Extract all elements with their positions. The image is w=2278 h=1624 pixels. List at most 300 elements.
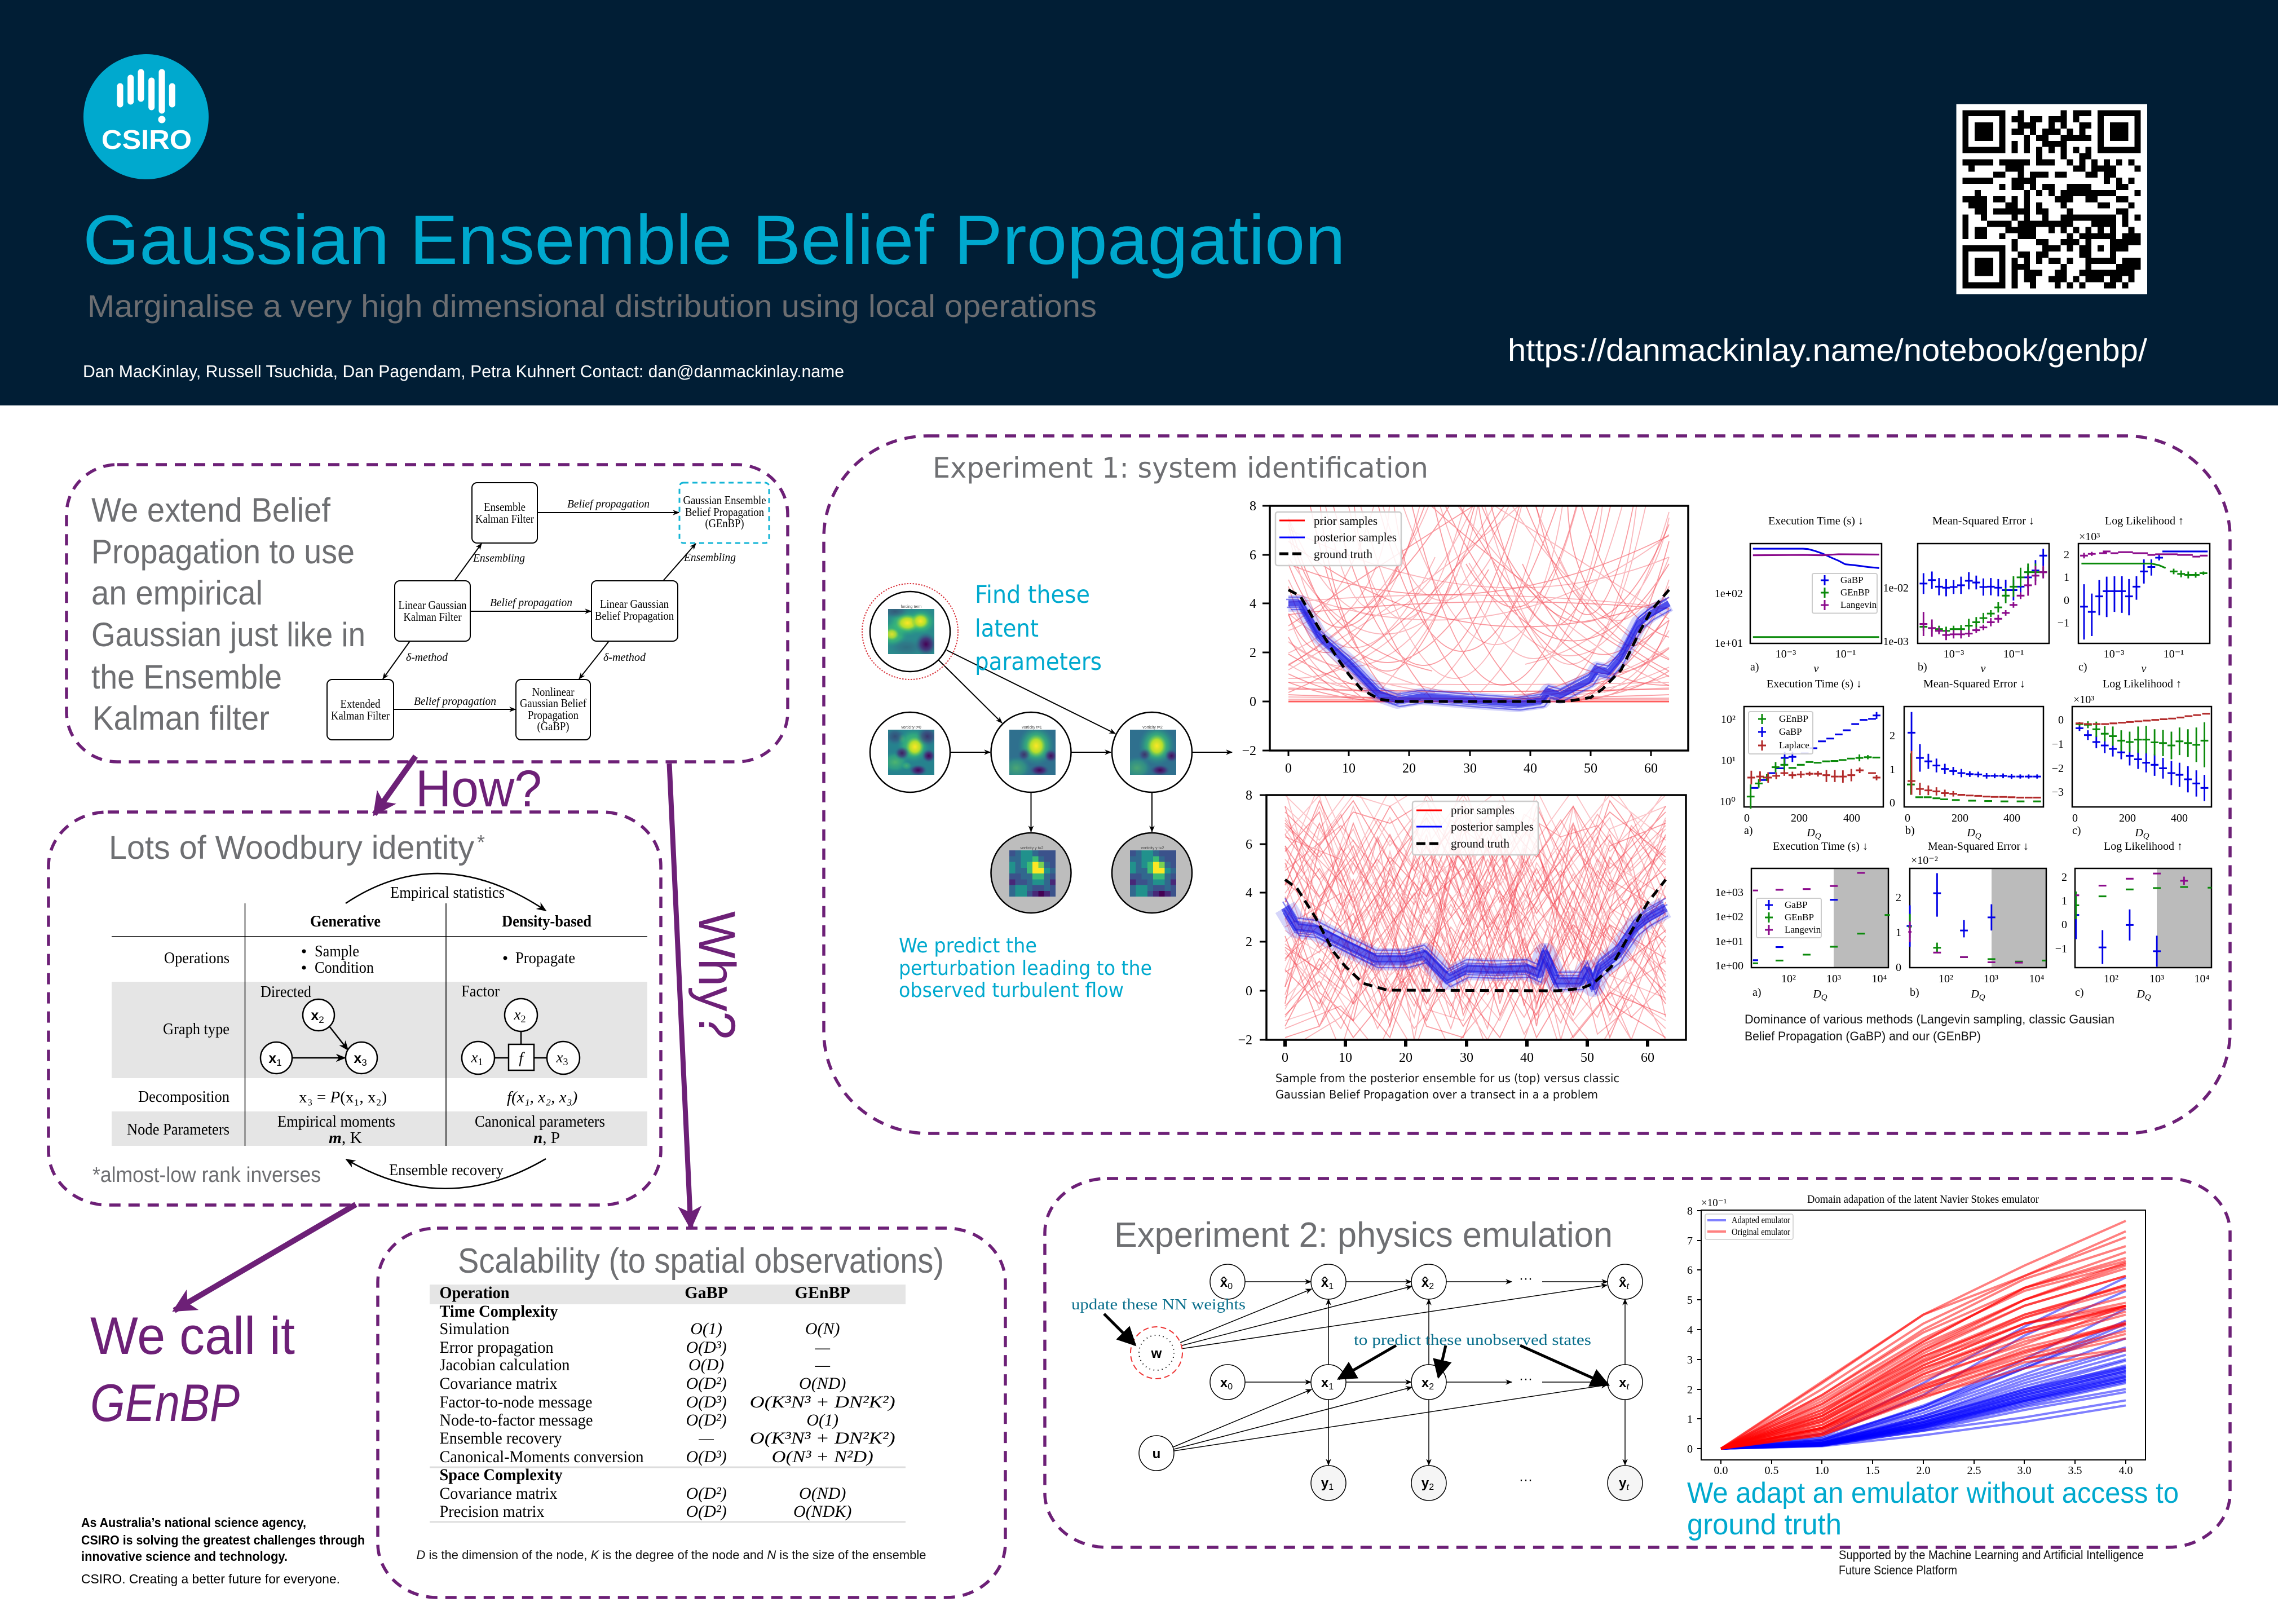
flow diagram: method relations: Nonlinear <box>532 685 574 699</box>
graph: directed model: x <box>311 1008 319 1023</box>
flow diagram: method relations: Ensembling <box>683 551 736 564</box>
flow diagram: method relations: Linear Gaussian <box>398 598 467 612</box>
comparison table: Directed <box>261 983 311 1001</box>
error-bar series <box>1747 549 2211 967</box>
complexity table: O(N) <box>805 1320 840 1338</box>
graphical model: emulator: y <box>1321 1476 1328 1491</box>
complexity table: Error propagation <box>440 1338 554 1357</box>
line chart: GaBP posterior: 8 <box>1246 788 1252 803</box>
line chart: GEnBP posterior: 8 <box>1250 499 1256 514</box>
axis labels: c) <box>2075 986 2084 999</box>
graph: factor model: 3 <box>563 1056 568 1067</box>
line chart: GaBP posterior: 4 <box>1246 886 1252 901</box>
complexity table: Simulation <box>440 1320 510 1338</box>
line chart: GaBP posterior: 20 <box>1399 1051 1412 1065</box>
axis labels: 200 <box>1791 812 1808 824</box>
comparison table: Ensemble recovery <box>389 1161 504 1179</box>
complexity table: Ensemble recovery <box>440 1429 562 1448</box>
axis labels: 400 <box>2003 812 2020 824</box>
axis labels: 1e+01 <box>1715 935 1743 948</box>
axis labels: 10² <box>1781 973 1796 985</box>
axis labels: −1 <box>2052 738 2064 751</box>
legend: row 2: Laplace <box>1779 740 1809 751</box>
complexity table: O(K³N³ + DN²K²) <box>750 1429 895 1448</box>
flow diagram: method relations: Propagation <box>528 708 579 722</box>
small heatmap titles: vorticity t=1 <box>1022 726 1042 730</box>
axis labels: 1e+02 <box>1715 588 1743 600</box>
text: we predict: perturbation leading to the <box>899 957 1152 980</box>
subtitle: Marginalise a very high dimensional distribution using local operations <box>87 288 1097 324</box>
complexity table <box>430 1283 906 1522</box>
axis labels: −1 <box>2058 617 2069 629</box>
graphical model: emulator: x̂ <box>1321 1275 1328 1290</box>
panel: experiment 2 <box>1045 1179 2230 1547</box>
line chart: GaBP posterior: 60 <box>1641 1051 1654 1065</box>
graphical model: emulator: x <box>1220 1375 1228 1391</box>
annotation: predict states: to predict these unobserved states <box>1354 1331 1591 1348</box>
axis labels: 2 <box>1896 892 1901 904</box>
axis labels: 10⁻³ <box>1944 648 1964 660</box>
legend: ground truth <box>1314 547 1372 561</box>
legend <box>1275 512 1401 566</box>
complexity table: O(D²) <box>686 1374 727 1393</box>
comparison table: Sample <box>315 942 359 960</box>
axis labels: a) <box>1752 986 1762 999</box>
complexity table: Node-to-factor message <box>440 1411 593 1429</box>
complexity table: Operation <box>440 1283 510 1302</box>
graph: factor model: 1 <box>478 1056 483 1067</box>
graphical model: emulator: 2 <box>1429 1382 1434 1392</box>
heatmap: forcing term <box>877 604 937 656</box>
axis labels: 10³ <box>2149 973 2164 985</box>
comparison table: m, K <box>329 1129 362 1147</box>
annotation: update weights: update these NN weights <box>1071 1296 1246 1313</box>
axis labels: c) <box>2078 661 2087 673</box>
axis labels: ×10³ <box>2073 694 2094 706</box>
graphical model: emulator: x̂ <box>1421 1275 1429 1290</box>
grey infeasible regions <box>1834 868 2211 968</box>
legend: prior samples <box>1314 514 1378 528</box>
flow diagram: method relations: Kalman Filter <box>331 709 390 722</box>
axis labels: 1e-03 <box>1883 636 1909 648</box>
text block: intro: the Ensemble <box>91 658 282 696</box>
comparison table: Operations <box>164 949 229 967</box>
axis labels: b) <box>1918 661 1927 673</box>
flow diagram: method relations: Gaussian Belief <box>520 696 586 710</box>
titles: Execution Time (s) ↓ <box>1768 515 1864 527</box>
small multiples: method dominance <box>1715 515 2211 1002</box>
axis labels: D <box>1813 988 1821 1000</box>
complexity table: O(D³) <box>686 1448 727 1466</box>
axis labels: 2 <box>2061 871 2067 884</box>
graphical model: emulator: 0 <box>1228 1382 1233 1392</box>
complexity table: O(D²) <box>686 1484 727 1503</box>
axis labels: Q <box>1975 832 1981 841</box>
graphical model: emulator: ··· <box>1519 1472 1533 1488</box>
caption: dominance: Dominance of various methods (Langevin sampling, classic Gausian <box>1745 1012 2114 1026</box>
comparison table: x₃ = P(x₁, x₂) <box>299 1088 387 1106</box>
line chart: GEnBP posterior: 30 <box>1463 761 1477 776</box>
legend: row 3 <box>1756 898 1821 938</box>
line chart: domain adaptation: 0.0 <box>1714 1464 1728 1477</box>
text block: intro: Propagation to use <box>91 533 355 571</box>
axis labels: Q <box>1821 993 1827 1002</box>
annotation: predict states <box>1339 1331 1608 1385</box>
complexity table: Space Complexity <box>440 1466 563 1484</box>
complexity table: O(D²) <box>686 1411 727 1429</box>
line chart: GEnBP posterior: 6 <box>1250 548 1256 563</box>
axis labels: D <box>1807 827 1815 839</box>
graphical model: emulator: 0 <box>1228 1282 1233 1291</box>
axis labels: 200 <box>2119 812 2136 824</box>
graphical model: emulator: x <box>1321 1375 1328 1391</box>
line chart: GaBP posterior: 0 <box>1246 984 1252 999</box>
axis labels: 0 <box>2061 919 2067 931</box>
label: Why?: Why? <box>688 911 745 1039</box>
line chart: GEnBP posterior <box>1243 501 1689 773</box>
graph: directed model: 3 <box>361 1057 367 1068</box>
axis labels: 0 <box>1744 812 1750 824</box>
flow diagram: method relations: Kalman Filter <box>475 512 534 526</box>
axis labels: ×10⁻² <box>1911 854 1938 867</box>
flow diagram: method relations: Belief propagation <box>567 498 650 510</box>
axis labels: −2 <box>2052 762 2064 775</box>
annotation: update weights <box>1071 1296 1246 1345</box>
caption: transect samples <box>1275 1071 1619 1101</box>
axis labels: ν <box>1814 663 1819 675</box>
line chart: GEnBP posterior: 50 <box>1584 761 1597 776</box>
icon: CSIRO logo: CSIRO <box>101 125 192 155</box>
flow diagram: method relations: δ-method <box>406 651 448 664</box>
text: find these latent parameters <box>975 581 1102 676</box>
axis labels: 10³ <box>1826 973 1841 985</box>
axis labels: D <box>2135 827 2143 839</box>
axis labels: 400 <box>2171 812 2188 824</box>
axis labels: 10² <box>1939 973 1953 985</box>
graphical model: emulator: u <box>1153 1446 1160 1462</box>
line chart: GaBP posterior: 50 <box>1581 1051 1594 1065</box>
text: we predict <box>899 934 1152 1002</box>
text: adaptation conclusion: ground truth <box>1687 1508 1842 1541</box>
flow diagram: method relations: Kalman Filter <box>404 610 461 624</box>
legend: ground truth <box>1451 836 1509 850</box>
complexity table: Factor-to-node message <box>440 1393 592 1411</box>
axis labels: 0 <box>1889 797 1895 809</box>
title: Gaussian Ensemble Belief Propagation <box>83 201 1345 279</box>
graph: directed model <box>261 999 377 1074</box>
axis labels: 1e+02 <box>1715 911 1743 923</box>
line chart: domain adaptation: 8 <box>1687 1205 1693 1217</box>
header band <box>0 0 2278 405</box>
graphical model: emulator: y <box>1421 1476 1429 1491</box>
text block: intro <box>91 491 365 737</box>
graph: factor model: f <box>519 1049 525 1066</box>
axis labels: 2 <box>2064 549 2069 561</box>
axis labels: −1 <box>2055 943 2067 955</box>
complexity table: O(ND) <box>799 1374 846 1393</box>
text: adaptation conclusion <box>1687 1477 2179 1541</box>
axis labels: 2 <box>1889 730 1895 742</box>
caption: dominance <box>1745 1012 2114 1043</box>
axis labels: 10⁰ <box>1720 796 1736 808</box>
comparison table: Condition <box>315 959 374 977</box>
heatmap: observation 1 <box>1009 850 1056 897</box>
line chart: GEnBP posterior: 4 <box>1250 597 1256 611</box>
icon: CSIRO logo <box>83 54 209 179</box>
axis labels: 10¹ <box>1721 754 1736 767</box>
line chart: GEnBP posterior: 0 <box>1250 695 1256 709</box>
axis labels: 0 <box>2064 594 2069 607</box>
complexity table: O(1) <box>806 1411 838 1429</box>
acknowledgement: Future Science Platform <box>1839 1563 1957 1577</box>
complexity table: GaBP <box>685 1283 728 1302</box>
complexity table: O(NDK) <box>793 1502 851 1521</box>
complexity table: Canonical-Moments conversion <box>440 1448 644 1466</box>
callout: We call it GEnBP <box>90 1306 295 1432</box>
graphical model: emulator: t <box>1626 1482 1629 1492</box>
titles: Log Likelihood ↑ <box>2104 840 2183 853</box>
comparison table: Generative <box>310 912 381 930</box>
legend: row 1: GaBP <box>1840 575 1864 585</box>
titles: Mean-Squared Error ↓ <box>1932 515 2034 527</box>
legend: row 2: GaBP <box>1779 726 1802 737</box>
panel: Woodbury identity <box>48 812 661 1205</box>
comparison table: Factor <box>461 982 500 1000</box>
small heatmap titles: forcing term <box>901 605 922 609</box>
axis labels <box>1715 531 2210 1002</box>
complexity table: O(D²) <box>686 1502 727 1521</box>
caption: transect samples: Gaussian Belief Propagation over a transect in a a problem <box>1275 1088 1598 1101</box>
text block: intro: Gaussian just like in <box>91 616 365 654</box>
complexity table: Precision matrix <box>440 1502 545 1521</box>
label: How?: How? <box>416 760 542 818</box>
flow diagram: method relations: Belief Propagation <box>685 505 764 519</box>
text: we predict: observed turbulent flow <box>899 979 1124 1002</box>
complexity table: — <box>698 1429 714 1448</box>
line chart: GaBP posterior: 6 <box>1246 837 1252 852</box>
axis labels: Q <box>1815 832 1821 841</box>
complexity table: GEnBP <box>795 1283 850 1302</box>
axis labels: 10⁻¹ <box>2164 648 2184 660</box>
axis labels: ×10³ <box>2079 531 2100 543</box>
text: we predict: We predict the <box>899 934 1037 957</box>
complexity table: Covariance matrix <box>440 1374 557 1393</box>
axis labels: a) <box>1744 824 1753 837</box>
axis labels: 1 <box>1896 926 1901 939</box>
graphical model: emulator: x̂ <box>1220 1275 1228 1290</box>
comparison table: n, P <box>533 1129 560 1147</box>
graphical model: emulator: 1 <box>1328 1382 1334 1392</box>
authors: Dan MacKinlay, Russell Tsuchida, Dan Pagendam, Petra Kuhnert Contact: dan@danmackinlay.name <box>83 361 844 381</box>
axis labels: a) <box>1750 661 1759 673</box>
small heatmap titles: vorticity y t=2 <box>1020 846 1044 850</box>
legend: row 3: Langevin <box>1785 924 1821 935</box>
axis labels: 1e+01 <box>1715 637 1743 650</box>
flow diagram: method relations: Linear Gaussian <box>600 597 669 611</box>
line chart: domain adaptation: 1.0 <box>1815 1464 1829 1477</box>
graphical model: emulator: ··· <box>1519 1271 1533 1286</box>
graphical model: emulator: 1 <box>1328 1482 1334 1492</box>
callout: We call it GEnBP: We call it <box>90 1306 295 1365</box>
axis labels: Q <box>2145 993 2151 1002</box>
axis labels: b) <box>1910 986 1919 999</box>
flow diagram: method relations: Belief propagation <box>414 695 496 708</box>
axes frames <box>1744 544 2211 968</box>
axis labels: −3 <box>2052 786 2064 798</box>
graphical model: emulator: y <box>1619 1476 1626 1491</box>
axis labels: 1e-02 <box>1883 582 1909 594</box>
panel: belief propagation extension <box>67 465 788 762</box>
legend: row 1: Langevin <box>1840 599 1877 610</box>
comparison table: Canonical parameters <box>475 1113 605 1131</box>
legend: row 1 <box>1812 573 1877 614</box>
axis labels: 10² <box>1721 713 1736 726</box>
legend: posterior samples <box>1314 530 1397 544</box>
text block: CSIRO statement: As Australia’s national science agency, <box>81 1515 306 1530</box>
legend: Adapted emulator <box>1732 1215 1790 1225</box>
legend: row 3: GaBP <box>1785 899 1808 910</box>
flow diagram: method relations: (GaBP) <box>537 720 570 733</box>
line chart: GEnBP posterior: 2 <box>1250 646 1256 660</box>
line chart: domain adaptation: 2 <box>1687 1384 1693 1396</box>
titles: Execution Time (s) ↓ <box>1767 678 1862 690</box>
line chart: domain adaptation: 0.5 <box>1765 1464 1778 1477</box>
caption: notation: D is the dimension of the node, K is the degree of the node and N is the size of the ensemble <box>416 1548 926 1562</box>
graphical model: emulator: t <box>1626 1282 1629 1291</box>
axis labels: Q <box>1979 993 1985 1002</box>
text block: intro: We extend Belief <box>91 491 330 529</box>
axis labels: 10⁻³ <box>2104 648 2124 660</box>
acknowledgement: Supported by the Machine Learning and Artificial Intelligence <box>1839 1548 2144 1562</box>
line chart: domain adaptation: 2.0 <box>1916 1464 1931 1477</box>
comparison table: Propagate <box>515 949 575 967</box>
line chart: domain adaptation: 0 <box>1687 1443 1693 1455</box>
heading: Experiment 2: physics emulation <box>1114 1216 1613 1255</box>
line chart: domain adaptation: 7 <box>1687 1235 1693 1247</box>
axis labels: 0 <box>1905 812 1910 824</box>
legend: posterior samples <box>1451 819 1534 833</box>
text block: intro: Kalman filter <box>92 699 270 737</box>
line chart: domain adaptation: 5 <box>1687 1294 1693 1307</box>
axis labels: D <box>1967 827 1975 839</box>
small heatmap titles: vorticity t=2 <box>1142 726 1163 730</box>
axis labels: 0 <box>1896 961 1901 974</box>
complexity table: Jacobian calculation <box>440 1356 570 1374</box>
arrow: how <box>374 756 416 814</box>
legend: prior samples <box>1451 803 1515 817</box>
complexity table: O(K³N³ + DN²K²) <box>750 1393 895 1411</box>
axis labels: 200 <box>1952 812 1968 824</box>
complexity table: O(1) <box>690 1320 722 1338</box>
line chart: GaBP posterior: 40 <box>1520 1051 1534 1065</box>
arrow: why <box>669 764 691 1228</box>
line chart: domain adaptation: 3.5 <box>2068 1464 2082 1477</box>
graph: factor model: x <box>471 1049 478 1066</box>
legend: row 1: GEnBP <box>1840 587 1870 598</box>
flow diagram: method relations: Ensemble <box>484 500 526 514</box>
axis labels: b) <box>1905 824 1915 837</box>
text: find these latent parameters: parameters <box>975 648 1102 676</box>
line chart: GaBP posterior: 10 <box>1339 1051 1352 1065</box>
complexity table: O(N³ + N²D) <box>772 1448 873 1466</box>
legend: row 2 <box>1749 712 1813 754</box>
acknowledgement <box>1839 1548 2144 1577</box>
graphical model: emulator: 2 <box>1429 1282 1434 1291</box>
comparison table: Decomposition <box>138 1088 229 1106</box>
text block: CSIRO statement: CSIRO is solving the greatest challenges through <box>81 1533 365 1547</box>
graph: directed model: x <box>354 1051 361 1066</box>
line chart: domain adaptation: 4 <box>1687 1324 1693 1336</box>
graphical model: latent parameters <box>862 584 1232 913</box>
flow diagram: method relations: Extended <box>341 697 381 710</box>
axis labels: Q <box>2143 832 2149 841</box>
graphical model: emulator: ··· <box>1519 1371 1533 1387</box>
flow diagram: method relations: (GEnBP) <box>705 517 744 530</box>
graphical model: emulator: 1 <box>1328 1282 1334 1291</box>
flow diagram: method relations: Belief propagation <box>490 597 572 609</box>
caption: transect samples: Sample from the posterior ensemble for us (top) versus classic <box>1275 1071 1619 1085</box>
complexity table: Covariance matrix <box>440 1484 557 1503</box>
titles: Log Likelihood ↑ <box>2105 515 2184 527</box>
axis labels: 1e+00 <box>1715 960 1743 972</box>
heatmap: vorticity t=2 <box>1122 726 1178 780</box>
axis labels: 0 <box>2058 714 2064 726</box>
heading: Lots of Woodbury identity <box>109 829 474 866</box>
comparison table <box>112 873 647 1189</box>
text block: intro: an empirical <box>91 574 263 612</box>
footnote: *almost-low rank inverses <box>92 1163 321 1187</box>
comparison table: f(x₁, x₂, x₃) <box>507 1088 577 1106</box>
line chart: domain adaptation: 3.0 <box>2017 1464 2031 1477</box>
heatmap: observation 2 <box>1130 850 1176 897</box>
panel: scalability <box>378 1228 1005 1597</box>
graphical model: emulator: x <box>1421 1375 1429 1391</box>
line chart: GEnBP posterior: 60 <box>1644 761 1658 776</box>
axis labels: 10⁴ <box>2195 973 2210 985</box>
graphical model: emulator: t <box>1626 1382 1629 1392</box>
heading: Scalability (to spatial observations) <box>458 1242 944 1281</box>
comparison table: Graph type <box>163 1020 229 1038</box>
complexity table: O(D) <box>688 1356 724 1374</box>
comparison table: Empirical statistics <box>390 884 505 902</box>
line chart: GEnBP posterior: 10 <box>1342 761 1356 776</box>
small heatmap titles: vorticity y t=2 <box>1141 846 1164 850</box>
axis labels: 10⁴ <box>1872 973 1887 985</box>
axis labels: D <box>1971 988 1979 1000</box>
line chart: domain adaptation: 3 <box>1687 1354 1693 1366</box>
line chart: domain adaptation: 6 <box>1687 1264 1693 1277</box>
text block: CSIRO statement: innovative science and technology. <box>81 1549 288 1564</box>
line chart: domain adaptation: Domain adapation of the latent Navier Stokes emulator <box>1807 1193 2039 1206</box>
graph: factor model <box>462 999 580 1074</box>
line chart: domain adaptation: 1 <box>1687 1413 1693 1426</box>
project url: https://danmackinlay.name/notebook/genbp/ <box>1508 332 2147 368</box>
titles: Mean-Squared Error ↓ <box>1923 678 2025 690</box>
line chart: domain adaptation <box>1687 1193 2145 1477</box>
comparison table: Node Parameters <box>127 1120 229 1138</box>
QR code <box>1957 104 2147 294</box>
panel: experiment 1 <box>824 436 2230 1133</box>
graph: directed model: x <box>268 1051 276 1066</box>
line chart: GaBP posterior <box>1238 784 1686 1065</box>
text: find these latent parameters: Find these <box>975 581 1090 609</box>
legend: Original emulator <box>1732 1226 1790 1237</box>
complexity table: O(D³) <box>686 1338 727 1357</box>
axis labels: 1 <box>2064 571 2069 584</box>
graphical model: emulator: x <box>1619 1375 1626 1391</box>
axis labels: 1e+03 <box>1715 886 1743 899</box>
graph: factor model: x <box>557 1049 563 1066</box>
